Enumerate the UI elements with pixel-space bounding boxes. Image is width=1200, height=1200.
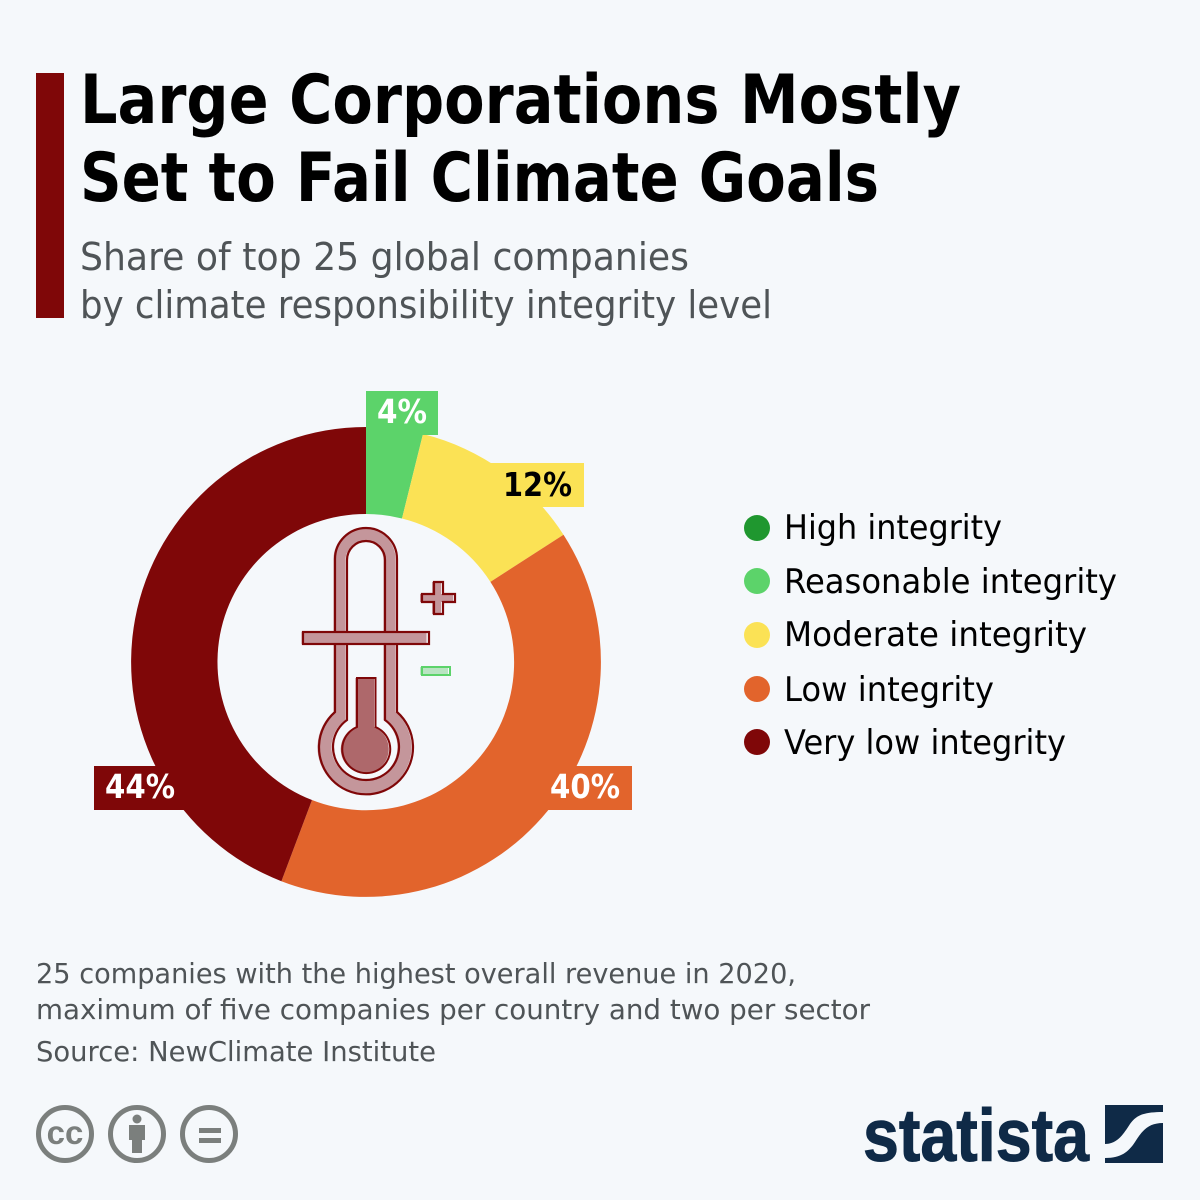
label: 12%: 12%: [503, 465, 572, 504]
legend: reasonable integrity: Reasonable integrity: [784, 562, 1117, 602]
thermometer tube outline: [319, 528, 413, 794]
plus sign outline: [422, 582, 455, 614]
title: Large Corporations Mostly: [80, 61, 961, 140]
icon: attribution: [110, 1108, 164, 1160]
label: 4%: 4%: [377, 392, 427, 431]
legend: [744, 508, 1117, 763]
subtitle: Share of top 25 global companies: [80, 235, 689, 279]
donut chart: [131, 427, 601, 897]
segment: moderate integrity 12%: [402, 434, 564, 582]
plus sign fill: [420, 582, 453, 614]
label: 40%: 40%: [550, 767, 620, 806]
icon: no derivatives: [182, 1108, 236, 1160]
thermometer mercury fill: [341, 678, 389, 773]
source: Source: NewClimate Institute: [36, 1035, 436, 1068]
segment: low integrity 40%: [281, 535, 601, 897]
statista wordmark: statista: [863, 1094, 1090, 1177]
thermometer crossbar fill: [302, 632, 426, 644]
segment: reasonable integrity 4%: [366, 427, 423, 518]
minus sign outline: [422, 667, 450, 675]
icon: creative commons: [38, 1108, 92, 1160]
subtitle: [80, 235, 772, 327]
legend: very low integrity: Very low integrity: [784, 723, 1066, 763]
legend: high integrity: High integrity: [784, 508, 1002, 548]
footnote: 25 companies with the highest overall revenue in 2020,: [36, 957, 796, 990]
accent bar: [36, 73, 64, 318]
legend: moderate integrity: Moderate integrity: [784, 615, 1087, 655]
segment: very low integrity 44%: [131, 427, 366, 881]
subtitle: by climate responsibility integrity level: [80, 283, 772, 327]
statista logo mark: [1105, 1105, 1163, 1163]
footnote: [36, 957, 870, 1026]
thermometer tube fill: [317, 528, 411, 794]
minus sign fill: [420, 667, 448, 675]
icon: creative commons: cc: [47, 1114, 83, 1151]
thermometer mercury outline: [342, 678, 390, 773]
icon: thermometer: [302, 528, 455, 794]
label: 44%: 44%: [105, 767, 175, 806]
title: Set to Fail Climate Goals: [80, 139, 879, 218]
label: 4%: [366, 391, 438, 435]
legend: low integrity: Low integrity: [784, 670, 994, 710]
thermometer crossbar outline: [303, 632, 429, 644]
title: [80, 61, 961, 218]
footnote: maximum of five companies per country and two per sector: [36, 993, 870, 1026]
